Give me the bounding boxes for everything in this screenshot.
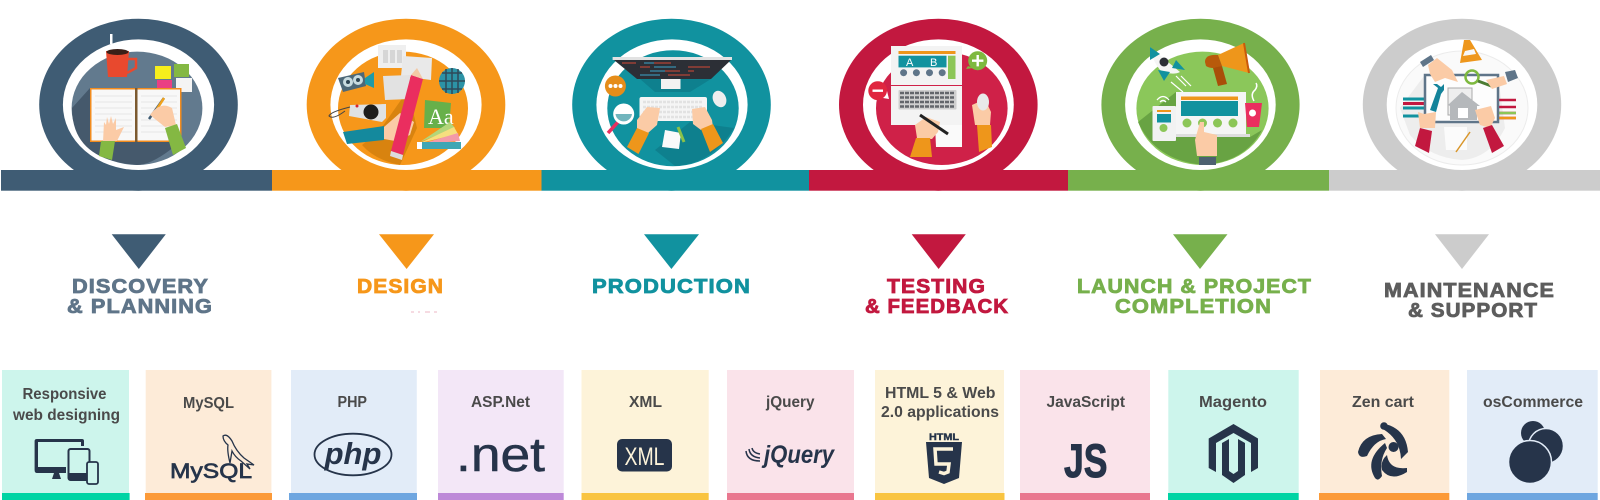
icon: magnifier [608, 104, 634, 133]
icon: plus bubble [966, 51, 987, 70]
icon: oscommerce logo [1508, 421, 1564, 484]
icon: chat bubble [605, 76, 626, 96]
panel: php [289, 370, 417, 500]
icon: wifi [1157, 96, 1169, 102]
label: JavaScript [1046, 394, 1126, 411]
icon: tablet screen with A B test: A [906, 57, 914, 69]
arrow: design [379, 234, 434, 269]
panel: magento [1168, 370, 1299, 500]
icon: responsive devices [35, 439, 98, 484]
timeline bar [1, 170, 1600, 191]
icon: sticky notes [155, 64, 192, 92]
arrow: discovery [112, 234, 166, 269]
panel: maintenance ring illustration [1363, 19, 1561, 191]
heading: launch and project completion: COMPLETION [1115, 296, 1272, 318]
panel: html5 and web 2.0 [875, 370, 1004, 500]
label: jQuery [765, 394, 815, 411]
label [12, 386, 120, 424]
panel: jquery [727, 370, 854, 500]
icon: wrench [1430, 84, 1444, 112]
icon: typing hands with orange sleeves [627, 107, 723, 154]
icon: bottom hands with crimson sleeves [1415, 106, 1504, 153]
icon: jquery logo: jQuery [761, 441, 835, 469]
icon: video camera [338, 72, 374, 92]
arrow: testing [912, 234, 966, 269]
icon: minus bubble [868, 81, 889, 100]
icon: paper [935, 125, 962, 147]
panel: responsive web designing [2, 370, 130, 500]
icon: monitor with house [1425, 75, 1498, 122]
decorative specks below design heading [411, 311, 437, 313]
icon: .net logo: .net [456, 429, 545, 482]
icon: books [1403, 99, 1516, 118]
heading: discovery and planning: & PLANNING [67, 296, 213, 318]
arrow: launch [1173, 234, 1228, 269]
heading: testing and feedback [865, 276, 1009, 318]
heading: discovery and planning [67, 276, 213, 318]
label: MySQL [183, 395, 234, 412]
icon: website monitor [1176, 92, 1250, 137]
icon: pointing hand with cuff [1420, 55, 1458, 82]
icon: rocket [1150, 47, 1191, 92]
label: XML [629, 394, 662, 411]
icon: writing hand and pencil [149, 98, 186, 155]
icon: mysql logo: MySQL [170, 460, 252, 483]
heading: maintenance and support: MAINTENANCE [1384, 280, 1555, 302]
icon: layout papers [378, 45, 432, 100]
label: web designing [12, 407, 120, 424]
icon: drink cup [1245, 83, 1262, 127]
heading: launch and project completion [1077, 276, 1312, 318]
icon: magento logo [1209, 424, 1258, 483]
icon: tablet screen with A B test: B [930, 57, 937, 69]
icon: laptop keyboard [891, 86, 962, 125]
icon: hand on mouse [972, 94, 992, 152]
heading: discovery and planning: DISCOVERY [72, 276, 209, 298]
label: osCommerce [1483, 394, 1583, 411]
icon: html5 shield: HTML [929, 432, 959, 443]
icon: note and pencil [662, 127, 684, 149]
heading: design: DESIGN [357, 276, 444, 298]
icon: traffic cone [1460, 40, 1482, 63]
icon: mouse [710, 89, 729, 109]
panel: oscommerce [1467, 370, 1598, 500]
icon: tablet screen with A B test [891, 46, 962, 85]
heading: launch and project completion: LAUNCH & PROJECT [1077, 276, 1312, 298]
panel: zen cart [1319, 370, 1449, 500]
panel: production ring illustration [572, 19, 771, 191]
heading: production: PRODUCTION [592, 276, 751, 298]
icon: php logo: php [324, 436, 381, 471]
label: Responsive [22, 386, 107, 403]
heading: maintenance and support: & SUPPORT [1408, 300, 1538, 322]
label [881, 385, 999, 421]
icon: js logo: JS [1064, 434, 1108, 487]
label: 2.0 applications [881, 404, 999, 421]
icon: magnifier hand [1466, 70, 1518, 89]
panel: design ring illustration [307, 19, 505, 191]
panel: launch ring illustration [1101, 19, 1300, 191]
icon: open notebook [90, 88, 182, 142]
icon: coffee mug [106, 34, 136, 77]
icon: zen cart logo [1358, 422, 1408, 480]
arrow: maintenance [1435, 234, 1489, 269]
arrow: production [644, 234, 699, 269]
panel: discovery ring illustration [39, 19, 238, 191]
icon: globe [439, 68, 465, 94]
label: Magento [1199, 394, 1267, 411]
icon: font card: Aa [428, 104, 454, 129]
panel: xml [582, 370, 709, 500]
panel: testing ring illustration [839, 19, 1038, 191]
icon: left hand and sleeve [99, 116, 124, 160]
icon: colour swatches [417, 122, 461, 149]
icon: desktop monitor [613, 57, 732, 89]
label: PHP [338, 394, 367, 411]
icon: pink pencil [390, 68, 423, 160]
icon: paper and pencil [1444, 127, 1470, 152]
icon: pointing hand [1195, 122, 1217, 165]
icon: megaphone [1205, 43, 1249, 86]
panel: mysql [145, 370, 272, 500]
panel: javascript [1020, 370, 1150, 500]
icon: keyboard [640, 97, 707, 121]
icon: arm and hand [343, 113, 414, 144]
heading: maintenance and support [1384, 280, 1555, 322]
icon: writing hand and pen [910, 115, 948, 157]
label: ASP.Net [471, 394, 531, 411]
heading: testing and feedback: TESTING [887, 276, 986, 298]
icon: xml badge: XML [624, 443, 665, 471]
icon: photo camera [329, 104, 386, 122]
label: HTML 5 & Web [885, 385, 996, 402]
panel: asp.net [438, 370, 564, 500]
label: Zen cart [1352, 394, 1415, 411]
heading: testing and feedback: & FEEDBACK [865, 296, 1009, 318]
icon: small tablet [1152, 106, 1176, 141]
